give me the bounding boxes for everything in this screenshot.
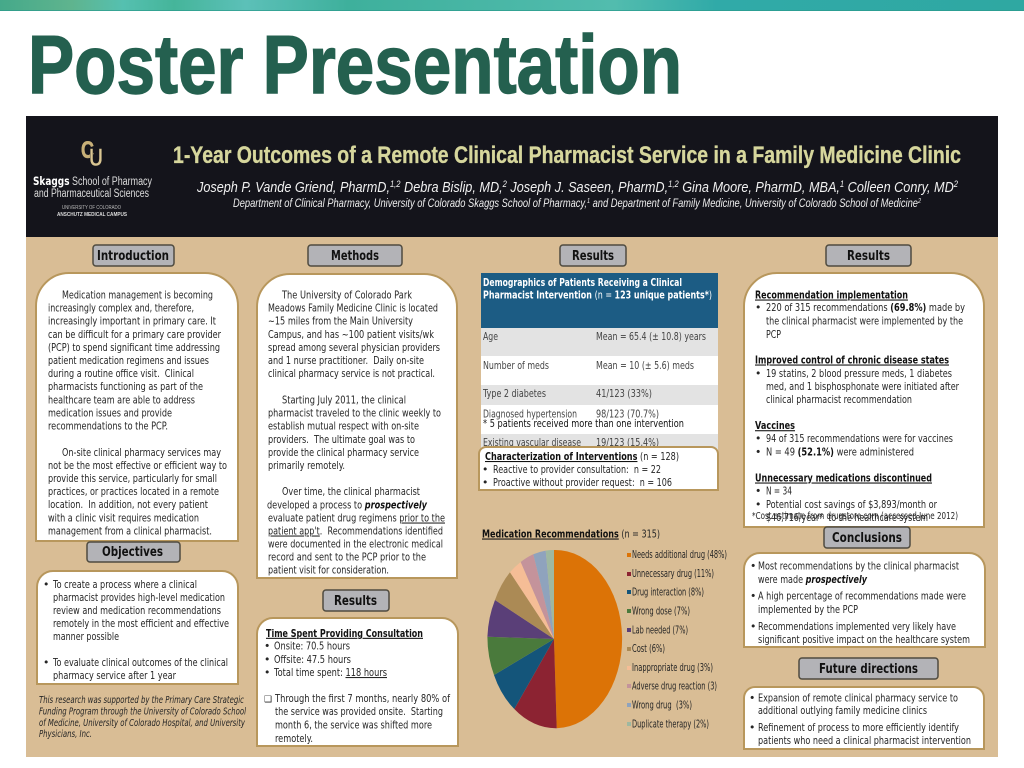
panel: introduction: can be difficult for a primary care provider xyxy=(48,328,221,341)
panel: introduction: pharmacists functioning as part of the xyxy=(48,380,203,393)
panel: characterization of interventions: • xyxy=(482,476,488,489)
table: demographics: Pharmacist Intervention (n = 123 unique patients*) xyxy=(483,288,712,302)
panel: methods: Campus, and has ~100 patient visits/wk xyxy=(268,328,435,341)
heading: Objectives xyxy=(87,542,180,562)
authors: 1,2 xyxy=(668,179,679,189)
panel: methods xyxy=(257,274,457,578)
panel: introduction: increasingly important in primary care. It xyxy=(48,315,216,328)
panel: objectives: To create a process where a clinical xyxy=(52,578,197,591)
heading: Future directions xyxy=(799,658,938,679)
heading: Introduction: Introduction xyxy=(97,249,169,264)
school name: ANSCHUTZ MEDICAL CAMPUS xyxy=(57,212,128,218)
heading: Methods: Methods xyxy=(331,249,379,264)
panel: objectives: • xyxy=(43,656,49,669)
panel: objectives: To evaluate clinical outcomes of the clinical xyxy=(52,656,228,669)
panel: outcomes: N = 34 xyxy=(766,484,792,498)
heading: Results (demographics) xyxy=(560,245,626,266)
authors: 1,2 xyxy=(390,179,401,189)
panel: introduction: On-site clinical pharmacy services may xyxy=(62,446,221,459)
panel: characterization of interventions: • xyxy=(482,463,488,476)
panel: introduction: location. In addition, not every patient xyxy=(48,498,208,511)
logo: CU monogram xyxy=(81,137,103,172)
logo: CU monogram: C xyxy=(81,137,94,164)
logo: CU monogram: U xyxy=(89,144,103,172)
panel: methods: provide the clinical pharmacy service xyxy=(268,446,419,459)
panel: methods: establish mutual respect with on-site xyxy=(268,420,419,432)
school name: Skaggs School of Pharmacy xyxy=(33,174,152,188)
affiliations: and Department of Family Medicine, University of Colorado School of Medicine xyxy=(590,196,918,210)
panel: time spent providing consultation: remotely. xyxy=(275,732,313,745)
panel: time spent providing consultation: Through the first 7 months, nearly 80% of xyxy=(274,692,450,705)
pie chart legend: Adverse drug reaction (3) xyxy=(632,680,717,693)
panel: methods: Meadows Family Medicine Clinic is located xyxy=(268,302,438,314)
panel: time spent providing consultation: • xyxy=(264,640,270,652)
panel: outcomes: • xyxy=(755,367,761,380)
panel: time spent providing consultation: • xyxy=(264,653,270,666)
pie chart legend: Drug interaction (8%) xyxy=(632,586,704,599)
panel: methods: primarily remotely. xyxy=(268,459,345,472)
panel: outcomes: • xyxy=(755,432,761,445)
funding note: Funding Program through the University of Colorado School xyxy=(39,707,246,718)
panel: conclusions: Most recommendations by the clinical pharmacist xyxy=(758,560,959,572)
panel: introduction: patient medication regimens and issues xyxy=(48,354,209,367)
panel: methods: patient app't. Recommendations identified xyxy=(268,524,443,538)
heading: Results (demographics): Results xyxy=(572,249,614,264)
slide title: Poster Presentation xyxy=(28,18,682,111)
panel: characterization of interventions: Proactive without provider request: n = 106 xyxy=(493,476,672,489)
panel: conclusions: Recommendations implemented very likely have xyxy=(758,620,956,633)
heading: Methods xyxy=(308,245,402,266)
panel: outcomes: $46,716/year* to the healthcare system xyxy=(766,511,928,524)
panel: methods: ~15 miles from the Main University xyxy=(268,314,413,328)
panel: methods: and 1 nurse practitioner. Daily on-site xyxy=(268,354,424,367)
heading: Objectives: Objectives xyxy=(102,545,163,560)
panel: conclusions: implemented by the PCP xyxy=(758,603,858,616)
panel: introduction: medication issues and provide xyxy=(48,406,172,419)
pie chart legend: Wrong drug (3%) xyxy=(632,698,692,711)
funding note xyxy=(39,695,246,740)
affiliations: 1 xyxy=(587,198,590,205)
school name xyxy=(33,174,152,218)
panel: introduction: healthcare team are able to address xyxy=(48,393,195,406)
panel: outcomes: clinical pharmacist recommendation xyxy=(766,393,912,406)
panel: methods: patient visit for consideration. xyxy=(268,564,389,576)
panel: time spent providing consultation: Total time spent: 118 hours xyxy=(273,666,387,679)
table: demographics: Demographics of Patients Receiving a Clinical xyxy=(483,276,682,289)
authors: 2 xyxy=(502,179,507,189)
panel: outcomes: Unnecessary medications discontinued xyxy=(755,472,932,484)
pie chart legend: Needs additional drug (48%) xyxy=(632,548,727,561)
panel: conclusions xyxy=(744,553,985,647)
panel: conclusions: • xyxy=(750,590,756,602)
panel: future directions: • xyxy=(749,692,755,704)
authors: Joseph P. Vande Griend, PharmD, xyxy=(197,179,425,196)
heading: medication recommendations: Medication Recommendations (n = 315) xyxy=(482,528,660,540)
panel: time spent providing consultation: Offsite: 47.5 hours xyxy=(274,653,351,666)
panel: introduction: (PCP) to spend significant time addressing xyxy=(48,341,220,354)
pie chart legend: Cost (6%) xyxy=(632,642,665,655)
panel: introduction: recommendations to the PCP. xyxy=(48,420,168,432)
panel: outcomes: • xyxy=(755,446,761,458)
panel: methods: providers. The ultimate goal was to xyxy=(268,433,415,446)
footnote: cost source: *Cost estimate from drugstore.com (accessed June 2012) xyxy=(752,511,958,522)
panel: objectives xyxy=(37,571,238,684)
heading: Conclusions xyxy=(824,527,910,548)
table: demographics: Mean = 65.4 (± 10.8) years xyxy=(596,330,706,343)
panel: introduction: increasingly complex and, therefore, xyxy=(48,302,194,315)
poster background xyxy=(26,116,998,757)
panel: outcomes xyxy=(744,273,984,527)
panel: characterization of interventions: Reactive to provider consultation: n = 22 xyxy=(493,463,661,476)
panel: future directions: • xyxy=(749,721,755,734)
panel: introduction xyxy=(36,273,238,541)
authors: Joseph J. Saseen, PharmD, xyxy=(507,179,668,196)
authors: 1 xyxy=(840,179,844,189)
panel: outcomes: N = 49 (52.1%) were administered xyxy=(766,446,914,458)
pie chart legend: Unnecessary drug (11%) xyxy=(632,567,714,580)
panel: outcomes: Recommendation implementation xyxy=(755,288,908,302)
panel: methods: developed a process to prospectively xyxy=(267,498,428,512)
table: demographics: Age xyxy=(483,330,498,343)
pie chart legend xyxy=(627,548,727,730)
table: demographics: Type 2 diabetes xyxy=(482,387,546,400)
authors: Debra Bislip, MD, xyxy=(401,179,503,196)
authors: Colleen Conry, MD xyxy=(844,179,954,196)
heading: Introduction xyxy=(93,245,174,266)
panel: outcomes: • xyxy=(755,498,761,511)
panel: outcomes: 94 of 315 recommendations were for vaccines xyxy=(766,432,953,445)
panel: objectives: • xyxy=(43,578,49,591)
panel: introduction: Medication management is becoming xyxy=(62,288,213,302)
table: demographics: 41/123 (33%) xyxy=(596,387,652,400)
panel: time spent providing consultation: ❑ xyxy=(264,695,272,705)
panel: future directions: additional outlying family medicine clinics xyxy=(758,704,927,717)
pie chart legend: Lab needed (7%) xyxy=(632,623,688,636)
panel: methods: Over time, the clinical pharmacist xyxy=(282,485,420,498)
panel: future directions: Expansion of remote clinical pharmacy service to xyxy=(758,692,958,704)
affiliations: 2 xyxy=(917,198,921,205)
heading: Future directions: Future directions xyxy=(819,662,918,677)
pie chart legend: Inappropriate drug (3%) xyxy=(632,661,713,674)
panel: methods: The University of Colorado Park xyxy=(281,288,413,302)
panel: time spent providing consultation: the service was provided onsite. Starting xyxy=(275,705,443,718)
panel: conclusions: were made prospectively xyxy=(758,573,868,586)
panel: methods: were documented in the electronic medical xyxy=(268,538,443,550)
table footnote: * 5 patients received more than one intervention xyxy=(483,417,684,430)
authors: Gina Moore, PharmD, MBA, xyxy=(679,179,840,196)
panel: outcomes: 19 statins, 2 blood pressure meds, 1 diabetes xyxy=(766,367,952,380)
panel: introduction: not be the most effective or efficient way to xyxy=(48,459,227,472)
heading: Conclusions: Conclusions xyxy=(832,531,902,546)
panel: introduction: with a clinic visit requires medication xyxy=(48,511,199,524)
table: demographics: 19/123 (15.4%) xyxy=(596,436,659,449)
table: demographics xyxy=(481,273,718,462)
panel: conclusions: • xyxy=(750,620,756,633)
affiliations: Department of Clinical Pharmacy, University of Colorado Skaggs School of Pharmacy, xyxy=(233,196,689,210)
panel: introduction: practices, or practices located in a remote xyxy=(48,485,219,498)
poster xyxy=(26,116,998,757)
panel: time spent providing consultation xyxy=(257,618,458,746)
school name: UNIVERSITY OF COLORADO xyxy=(62,205,121,211)
panel: objectives: remotely in the most efficient and effective xyxy=(53,617,229,630)
panel: objectives: pharmacy service after 1 year xyxy=(53,669,176,682)
panel: future directions xyxy=(744,687,984,749)
panel: methods: record and sent to the PCP prior to the xyxy=(268,550,426,564)
panel: outcomes: med, and 1 bisphosphonate were initiated after xyxy=(766,380,959,393)
heading: Results (outcomes): Results xyxy=(847,249,890,264)
table: demographics: Existing vascular disease xyxy=(483,436,581,449)
panel: time spent providing consultation: Time Spent Providing Consultation xyxy=(266,627,423,640)
heading: Results (time): Results xyxy=(334,594,377,609)
panel: introduction: during a routine office visit. Clinical xyxy=(48,367,194,380)
panel: characterization of interventions: Characterization of Interventions (n = 128) xyxy=(485,450,679,463)
school name: and Pharmaceutical Sciences xyxy=(34,188,149,200)
panel: outcomes: Improved control of chronic disease states xyxy=(755,354,949,366)
panel: methods: Starting July 2011, the clinical xyxy=(282,394,406,406)
table: demographics: Mean = 10 (± 5.6) meds xyxy=(596,359,694,372)
pie chart legend: Duplicate therapy (2%) xyxy=(632,717,709,730)
panel: introduction: management from a clinical pharmacist. xyxy=(48,524,212,537)
panel: time spent providing consultation: • xyxy=(264,666,270,679)
table: demographics: 98/123 (70.7%) xyxy=(596,408,659,420)
pie chart legend: Wrong dose (7%) xyxy=(632,605,690,618)
panel: methods: spread among several physician providers xyxy=(268,341,440,354)
panel: methods: clinical pharmacy service is not practical. xyxy=(268,367,435,380)
pie chart: medication recommendations xyxy=(487,550,622,728)
table: demographics: Number of meds xyxy=(483,359,549,372)
funding note: This research was supported by the Primary Care Strategic xyxy=(39,695,244,706)
panel: methods: pharmacist traveled to the clinic weekly to xyxy=(268,406,441,420)
panel: outcomes: Potential cost savings of $3,893/month or xyxy=(766,498,937,511)
top gradient band xyxy=(0,0,1024,11)
table: demographics: Diagnosed hypertension xyxy=(483,408,577,420)
poster header xyxy=(26,116,998,237)
panel: outcomes: the clinical pharmacist were implemented by the xyxy=(766,314,963,328)
panel: characterization of interventions xyxy=(479,447,718,490)
authors: 2 xyxy=(953,179,958,189)
panel: outcomes: PCP xyxy=(766,328,781,341)
funding note: Physicians, Inc. xyxy=(39,729,92,740)
panel: introduction: provide this service, particularly for small xyxy=(48,472,217,485)
panel: methods: evaluate patient drug regimens prior to the xyxy=(268,512,445,524)
heading: Results (time) xyxy=(323,590,389,611)
panel: outcomes: 220 of 315 recommendations (69.8%) made by xyxy=(766,301,965,314)
panel: outcomes: • xyxy=(755,484,761,498)
panel: time spent providing consultation: month 6, the service was shifted more xyxy=(275,718,432,732)
heading: Results (outcomes) xyxy=(826,245,911,266)
panel: conclusions: • xyxy=(750,560,756,572)
funding note: of Medicine, University of Colorado Hospital, and University xyxy=(39,718,246,729)
panel: future directions: Refinement of process to more efficiently identify xyxy=(758,721,959,734)
panel: objectives: pharmacist provides high-level medication xyxy=(53,591,225,604)
panel: objectives: manner possible xyxy=(53,630,119,643)
panel: outcomes: • xyxy=(755,301,761,314)
panel: outcomes: Vaccines xyxy=(755,419,795,432)
panel: time spent providing consultation: Onsite: 70.5 hours xyxy=(274,640,350,652)
panel: objectives: review and medication recommendations xyxy=(53,604,221,617)
